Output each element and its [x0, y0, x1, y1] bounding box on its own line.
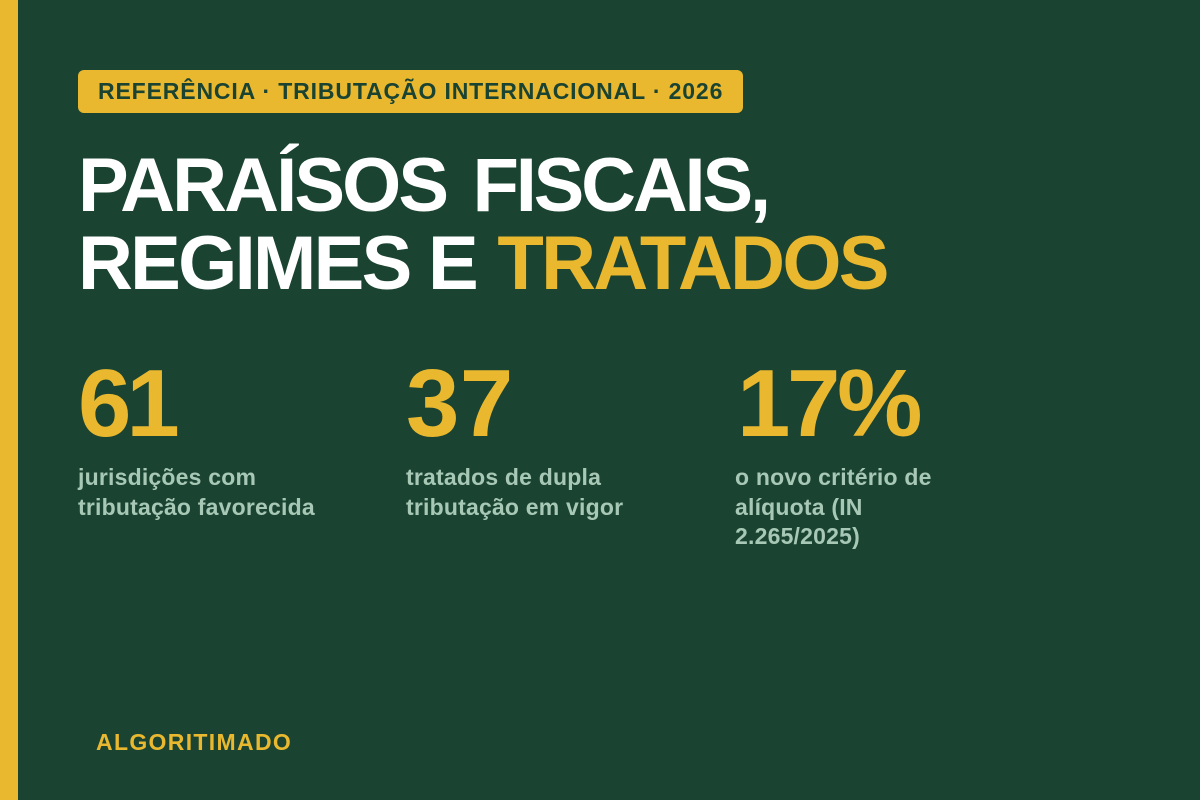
stat: 37 treaties [406, 350, 623, 520]
stat: 17% rate [735, 350, 932, 549]
accent bar [0, 0, 18, 800]
stat: 61 jurisdictions: 61 [78, 350, 175, 457]
stat: 37 treaties: tributação em vigor [406, 494, 623, 520]
stat: 37 treaties: tratados de dupla [406, 464, 601, 490]
stat: 37 treaties: 37 [406, 350, 514, 457]
stat: 61 jurisdictions [78, 350, 315, 520]
stat: 17% rate: 17% [737, 350, 919, 457]
title [78, 143, 887, 306]
brand footer: ALGORITIMADO [96, 729, 292, 755]
stat: 17% rate: 2.265/2025) [735, 523, 860, 549]
badge [78, 70, 743, 113]
badge: REFERÊNCIA · TRIBUTAÇÃO INTERNACIONAL · 2026 [98, 78, 723, 104]
title: REGIMES E TRATADOS [78, 221, 887, 306]
stat: 17% rate: o novo critério de [735, 464, 932, 490]
stat: 61 jurisdictions: tributação favorecida [78, 494, 315, 520]
title: PARAÍSOS FISCAIS, [78, 143, 768, 228]
stat: 17% rate: alíquota (IN [735, 494, 863, 520]
stat: 61 jurisdictions: jurisdições com [78, 464, 256, 490]
